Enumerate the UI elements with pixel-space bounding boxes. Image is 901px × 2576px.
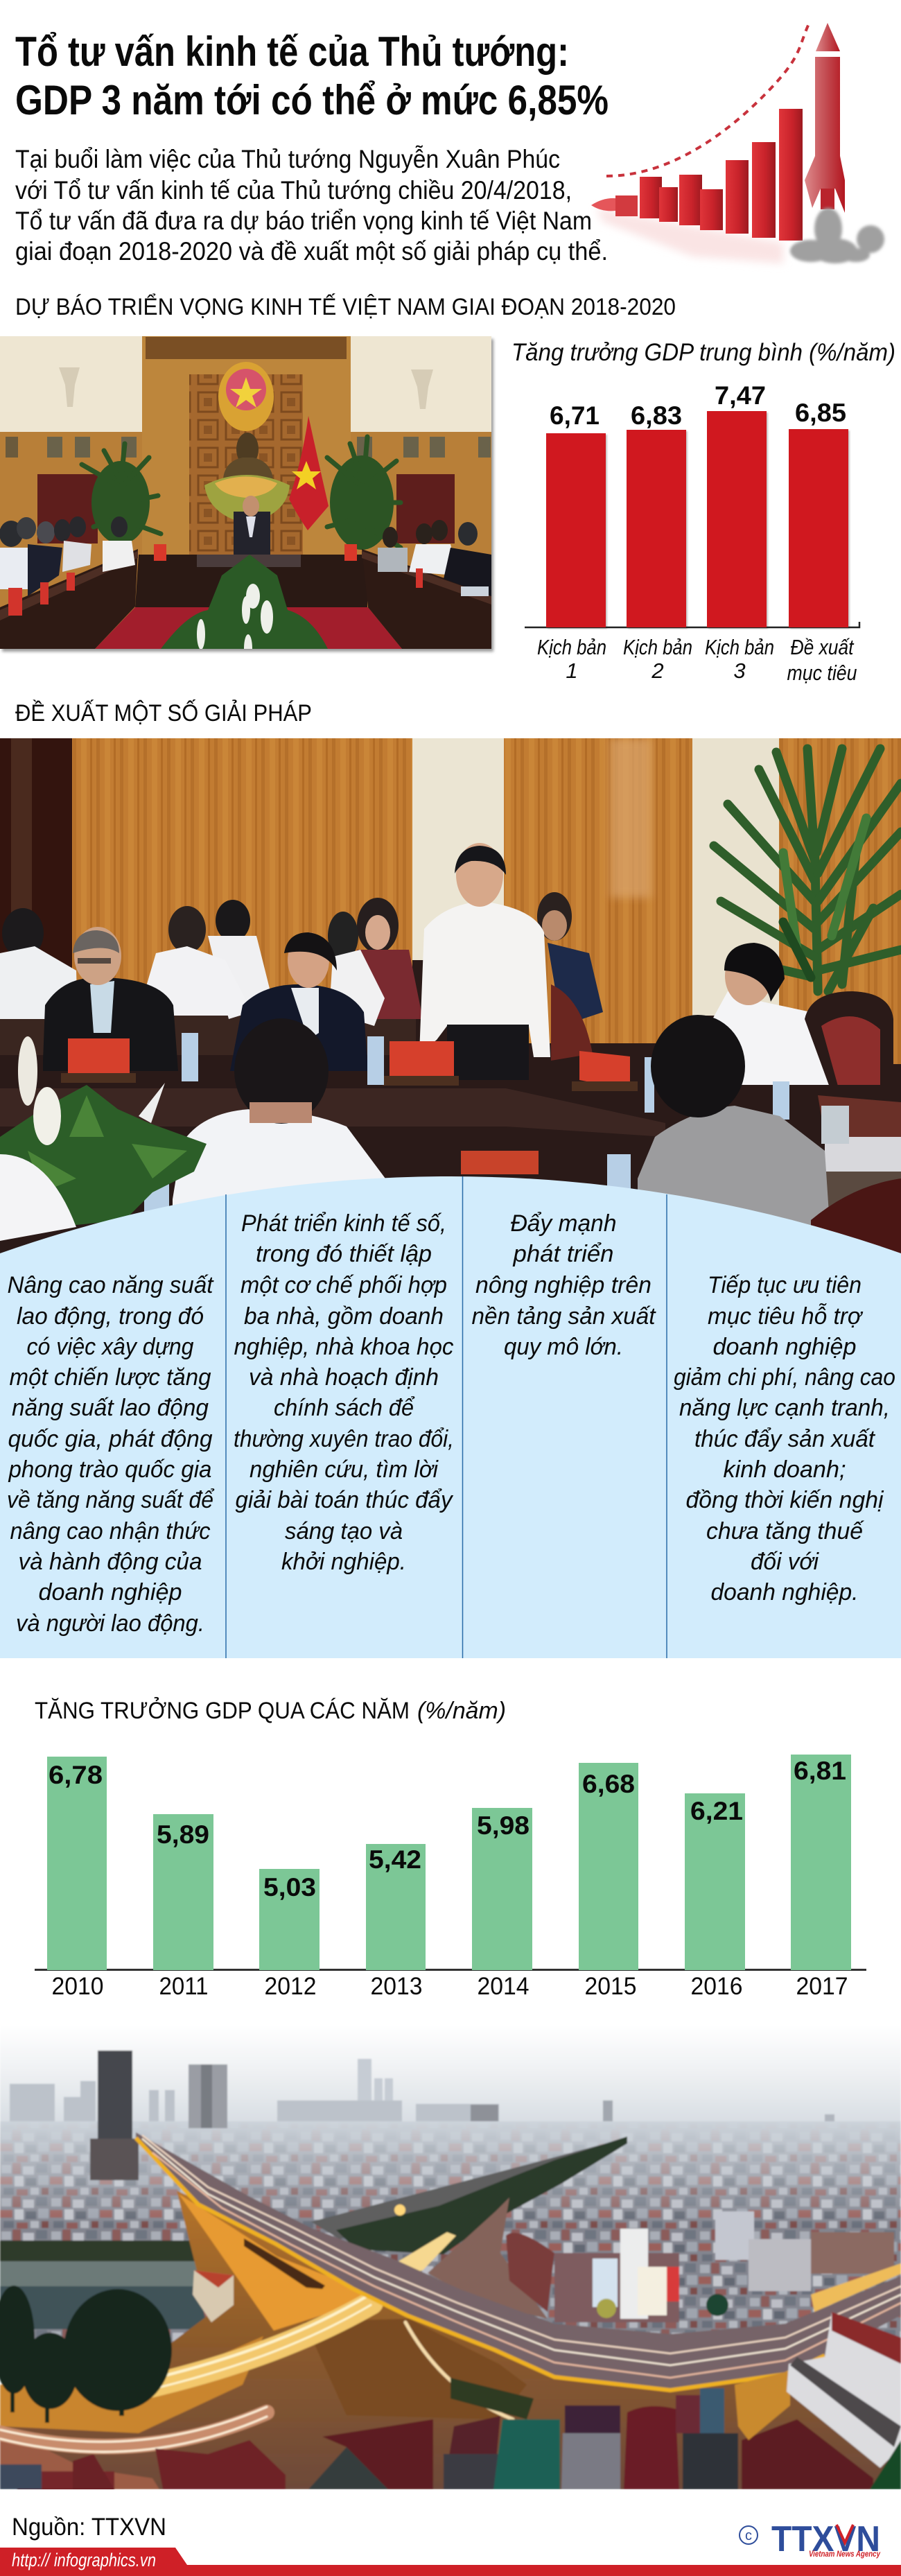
column 3 text: quy mô lớn. — [504, 1334, 623, 1360]
column 4 text: kinh doanh; — [724, 1456, 846, 1483]
values: 5,98 — [477, 1811, 530, 1840]
title: GDP 3 năm tới có thể ở mức 6,85% — [15, 77, 609, 123]
column 4 text: chưa tăng thuế — [706, 1518, 864, 1544]
footer red bar: http:// infographics.vn — [12, 2550, 156, 2570]
dense city — [0, 2121, 901, 2357]
years: 2013 — [370, 1973, 423, 2000]
intro text: Tại buổi làm việc của Thủ tướng Nguyễn Xuân Phúc — [15, 145, 560, 173]
source: Nguồn: TTXVN — [12, 2514, 166, 2541]
column 4 text: năng lực cạnh tranh, — [679, 1395, 890, 1421]
bar values: 7,47 — [715, 381, 766, 410]
years — [51, 1973, 848, 2000]
years: 2017 — [796, 1973, 848, 2000]
column 3 text: nền tảng sản xuất — [471, 1303, 656, 1330]
riverside — [0, 2240, 208, 2329]
column 1 text: có việc xây dựng — [26, 1334, 194, 1360]
bar labels: Kịch bản — [537, 635, 606, 659]
column 2 text: Phát triển kinh tế số, — [241, 1210, 446, 1237]
column 2 text: chính sách để — [274, 1395, 415, 1421]
column 1 text: Nâng cao năng suất — [7, 1272, 214, 1298]
bar values — [550, 381, 846, 430]
column 3 text — [471, 1210, 656, 1360]
light trails — [0, 2296, 513, 2452]
years: 2010 — [51, 1973, 104, 2000]
values: 5,03 — [263, 1873, 316, 1901]
column 2 text: một cơ chế phối hợp — [240, 1272, 447, 1298]
man in navy suit — [230, 932, 368, 1071]
years: 2015 — [585, 1973, 636, 2000]
column 1 text: và người lao động. — [16, 1610, 204, 1637]
roofs — [0, 2371, 873, 2492]
column 2 text: thường xuyên trao đổi, — [234, 1426, 454, 1452]
column 4 text: đồng thời kiến nghị — [686, 1487, 884, 1513]
heading: forecast: DỰ BÁO TRIỂN VỌNG KINH TẾ VIỆT NAM GIAI ĐOẠN 2018-2020 — [15, 294, 676, 320]
plant behind speaker — [714, 749, 901, 991]
column 3 text: nông nghiệp trên — [475, 1272, 651, 1298]
front shops — [394, 2204, 901, 2322]
far skyline — [9, 2058, 835, 2123]
column 3 text: Đẩy mạnh — [510, 1210, 617, 1237]
title: Tổ tư vấn kinh tế của Thủ tướng: — [15, 28, 569, 75]
trees — [0, 2286, 172, 2423]
column 4 text: doanh nghiệp — [712, 1334, 857, 1360]
years: 2014 — [477, 1973, 530, 2000]
column 1 text: quốc gia, phát động — [8, 1426, 213, 1452]
values: 6,68 — [582, 1770, 635, 1798]
plant front left — [0, 1036, 207, 1227]
column 2 text: trong đó thiết lập — [256, 1241, 432, 1267]
column 2 text — [234, 1210, 454, 1575]
column 4 text — [674, 1272, 895, 1605]
seated people back row — [0, 892, 603, 1026]
column 4 text: mục tiêu hỗ trợ — [708, 1303, 863, 1330]
right building — [787, 2312, 901, 2489]
values: 5,89 — [157, 1820, 209, 1849]
column 2 text: và nhà hoạch định — [249, 1364, 439, 1391]
column 1 text: doanh nghiệp — [39, 1579, 182, 1605]
years: 2012 — [265, 1973, 316, 2000]
bar labels: 2 — [651, 659, 664, 683]
icon: rocket and rising bar chart — [591, 21, 884, 263]
table — [733, 1085, 880, 1109]
intro text: với Tổ tư vấn kinh tế của Thủ tướng chiều 20/4/2018, — [15, 176, 572, 204]
man in dark suit — [43, 927, 178, 1071]
bar labels: mục tiêu — [787, 661, 857, 685]
heading: proposed solutions: ĐỀ XUẤT MỘT SỐ GIẢI PHÁP — [15, 699, 312, 726]
logo: TTXVN: Vietnam News Agency — [809, 2549, 881, 2559]
column 1 text: và hành động của — [18, 1549, 202, 1575]
plants — [82, 437, 401, 550]
bar values: 6,71 — [550, 401, 600, 430]
bar chart: scenarios — [525, 381, 859, 685]
column 1 text: nâng cao nhận thức — [10, 1518, 211, 1544]
column dividers — [226, 1176, 667, 1658]
road surface and glow — [0, 2191, 901, 2489]
column 4 text: thúc đẩy sản xuất — [694, 1426, 876, 1452]
back of heads and shoulders — [173, 1015, 830, 1234]
values: 6,78 — [49, 1761, 103, 1789]
name plates — [61, 1038, 638, 1174]
bar values: 6,83 — [631, 401, 682, 430]
bar labels: 3 — [733, 659, 746, 683]
column 2 text: khởi nghiệp. — [281, 1549, 406, 1575]
bar labels: Kịch bản — [623, 635, 692, 659]
intro text — [15, 145, 608, 266]
column 2 text: ba nhà, gồm doanh — [244, 1303, 444, 1330]
bar chart: GDP by year — [35, 1755, 866, 2000]
bar labels: Kịch bản — [705, 635, 774, 659]
bar labels: 1 — [566, 659, 578, 683]
years: 2011 — [159, 1973, 208, 2000]
logo: TTXVN: TTXVN — [771, 2519, 880, 2559]
title — [15, 28, 609, 123]
column 1 text: lao động, trong đó — [17, 1303, 204, 1330]
column 4 text: Tiếp tục ưu tiên — [708, 1272, 861, 1298]
values: 6,81 — [794, 1757, 846, 1785]
photo: Hanoi overpass at dusk — [0, 2024, 901, 2492]
column 1 text: năng suất lao động — [12, 1395, 209, 1421]
column 3 text: phát triển — [512, 1241, 614, 1267]
bar labels: Đề xuất — [790, 635, 855, 659]
photo: cabinet meeting room — [0, 336, 493, 662]
bars — [47, 1755, 851, 1970]
column 1 text: về tăng năng suất để — [7, 1487, 215, 1513]
panel: solutions — [0, 1176, 901, 1658]
column 1 text — [7, 1272, 215, 1637]
column 2 text: nghiên cứu, tìm lời — [250, 1456, 439, 1483]
bar values: 6,85 — [795, 399, 846, 427]
logo: TTXVN: c — [745, 2528, 752, 2543]
man writing right — [713, 943, 829, 1085]
towers — [90, 2051, 227, 2180]
column 2 text: giải bài toán thúc đẩy — [236, 1487, 453, 1513]
canal and trees — [311, 2136, 627, 2319]
years: 2016 — [690, 1973, 743, 2000]
overpass — [136, 2132, 901, 2390]
photo: advisory group meeting — [0, 738, 901, 1269]
chair — [805, 991, 893, 1085]
column 1 text: một chiến lược tăng — [10, 1364, 211, 1391]
values: 5,42 — [369, 1845, 421, 1874]
values — [49, 1757, 846, 1901]
intro text: Tổ tư vấn đã đưa ra dự báo triển vọng kinh tế Việt Nam — [15, 207, 592, 235]
standing man — [419, 843, 550, 1080]
column 2 text: nghiệp, nhà khoa học — [234, 1334, 453, 1360]
heading: GDP growth by year: TĂNG TRƯỞNG GDP QUA CÁC NĂM — [35, 1698, 410, 1724]
column 4 text: đối với — [751, 1549, 819, 1575]
values: 6,21 — [690, 1797, 743, 1825]
intro text: giai đoạn 2018-2020 và đề xuất một số giải pháp cụ thể. — [15, 237, 608, 266]
water bottles — [144, 1033, 789, 1213]
column 4 text: doanh nghiệp. — [711, 1579, 858, 1605]
bar labels — [537, 635, 857, 685]
footer red bar — [0, 2548, 901, 2576]
heading: GDP growth by year: (%/năm) — [417, 1698, 506, 1724]
column 2 text: sáng tạo và — [285, 1518, 403, 1544]
column 1 text: phong trào quốc gia — [8, 1456, 212, 1483]
